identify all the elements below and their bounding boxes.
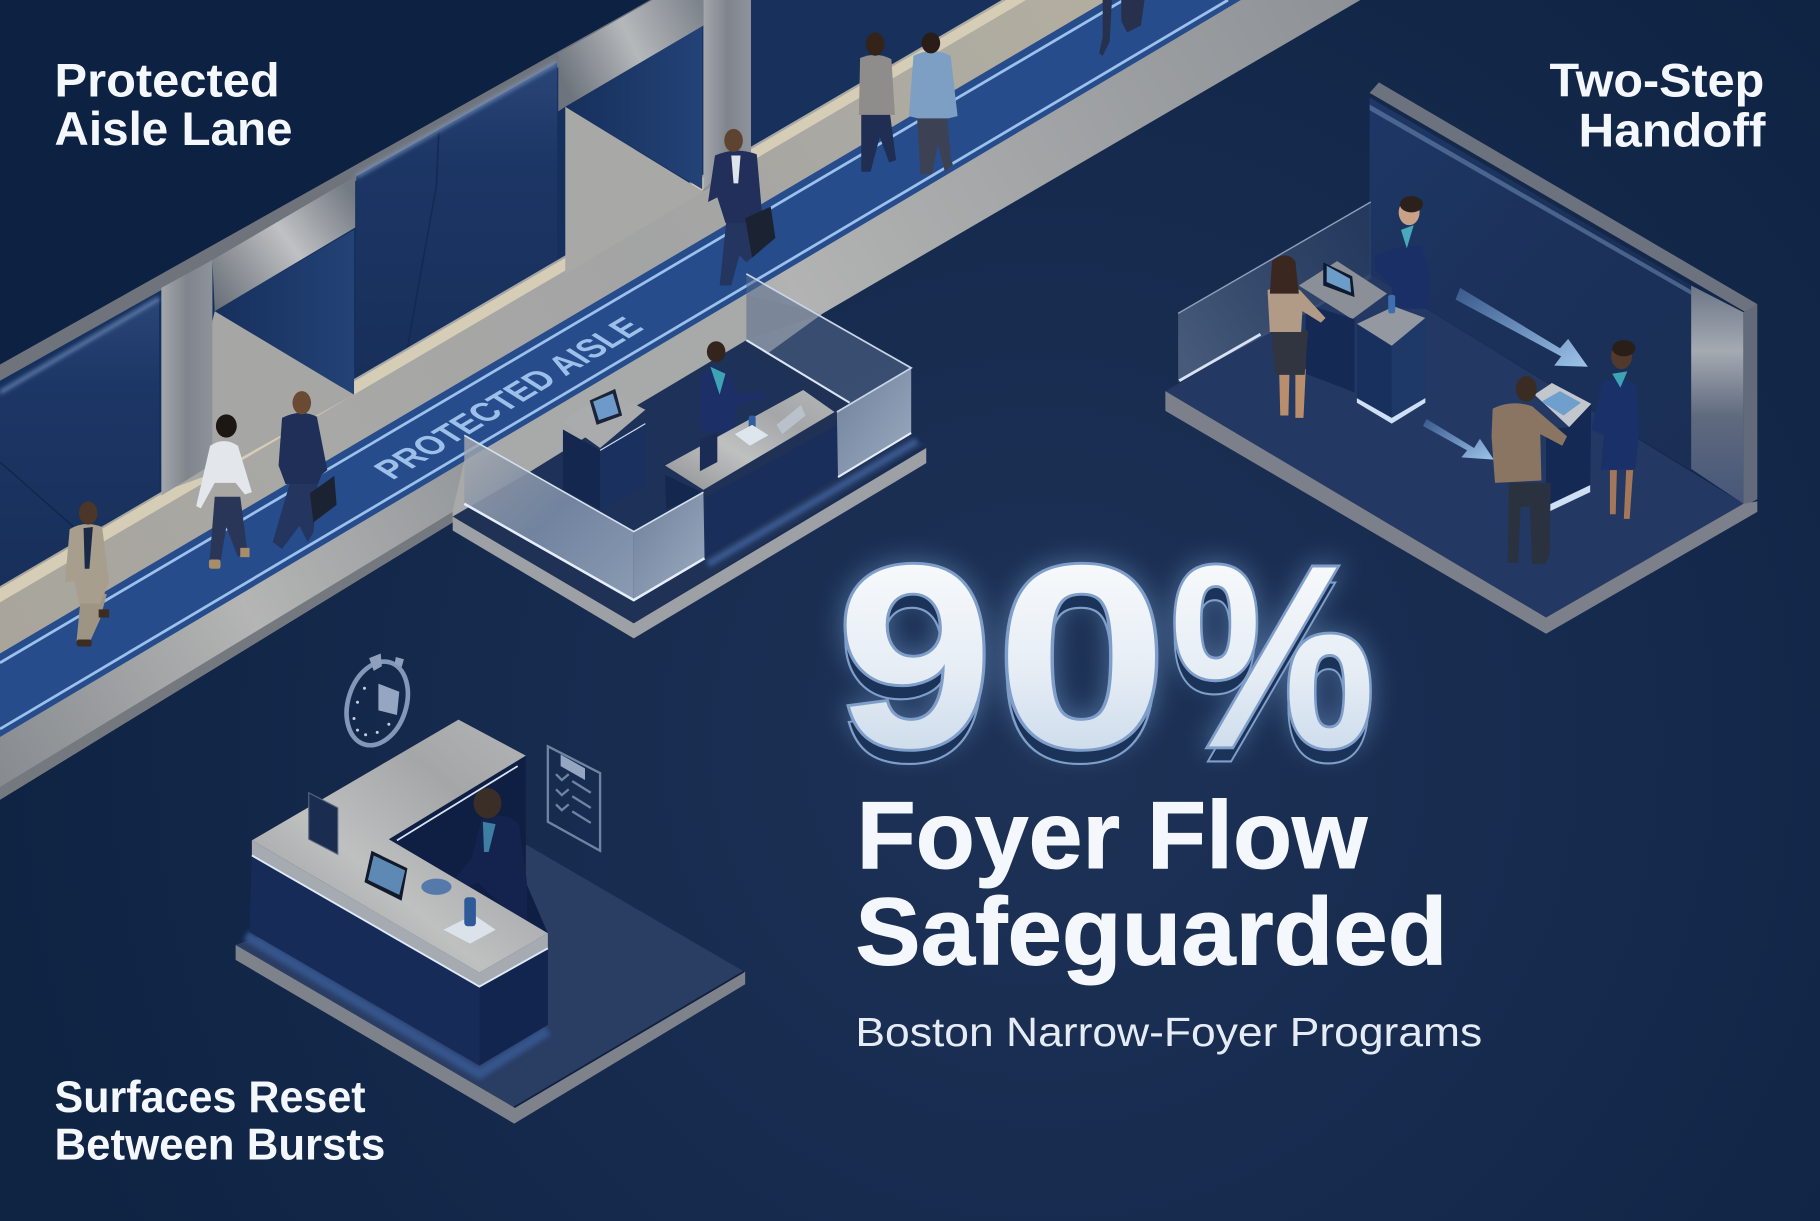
lower curb — [0, 0, 1360, 800]
big statistic: 90%: 0 — [996, 512, 1168, 802]
headline: foyer flow safeguarded: Foyer Flow — [857, 783, 1368, 889]
wall panel right — [751, 0, 1002, 145]
pillar 2 — [703, 0, 751, 189]
reception desk — [665, 390, 837, 558]
blue aisle floor — [0, 0, 1241, 737]
upper left dark backdrop — [0, 0, 656, 369]
cleaning cloth — [421, 879, 452, 895]
icon: stopwatch — [336, 653, 418, 753]
big statistic: 90%: 9 — [837, 512, 993, 802]
door opening 2 back wall — [565, 26, 702, 189]
wall panel left — [0, 298, 159, 586]
panel: reception with glass shields — [453, 274, 926, 638]
desk top — [252, 720, 548, 973]
desk platform floor — [236, 845, 744, 1107]
platform top — [453, 339, 925, 623]
headline: foyer flow safeguarded: Safeguarded — [855, 880, 1447, 986]
aisle edge lines — [0, 0, 1228, 729]
heading: protected aisle lane: Aisle Lane — [55, 103, 292, 156]
icon: clipboard — [548, 746, 600, 851]
person: woman white blouse — [196, 414, 252, 569]
big statistic: 90%: 9 — [837, 512, 993, 802]
subtitle: Boston Narrow-Foyer Programs — [855, 1009, 1482, 1055]
desk base glow — [708, 441, 917, 564]
sanitizer bottle — [464, 897, 476, 926]
handoff arrow 2 — [1423, 419, 1494, 460]
door opening 1 floor — [174, 311, 354, 488]
person: tan suit walker — [65, 501, 109, 647]
intake agent — [1374, 196, 1430, 309]
handoff arrow 1 — [1456, 288, 1588, 367]
front right glass shield — [634, 492, 705, 600]
heading: surfaces reset between bursts: Between Bursts — [55, 1121, 385, 1170]
booth floor — [1165, 274, 1743, 618]
heading: two-step handoff — [1550, 54, 1766, 157]
desk tablet — [364, 851, 407, 901]
notch recess — [389, 756, 548, 933]
wall panel centre — [356, 63, 557, 377]
pillar 1 — [161, 260, 212, 496]
big statistic: 90%: 9 — [836, 527, 992, 817]
upper concrete floor — [0, 0, 1114, 657]
desk platform base — [236, 945, 745, 1124]
desk sign — [309, 793, 338, 854]
heading: surfaces reset between bursts: Surfaces Reset — [55, 1073, 366, 1122]
big statistic: 90%: % — [1170, 512, 1375, 802]
front left glass shield — [464, 435, 634, 600]
left glass wall — [1178, 202, 1371, 382]
base glow — [246, 936, 548, 1074]
heading: surfaces reset between bursts — [55, 1073, 385, 1170]
person: top partial — [1099, 0, 1144, 56]
platform front — [453, 448, 926, 638]
handoff podium — [1534, 383, 1591, 513]
heading: protected aisle lane — [55, 54, 293, 156]
panel: surfaces reset desk — [236, 720, 745, 1124]
headline: foyer flow safeguarded — [855, 783, 1447, 986]
person: navy suit man upper — [708, 129, 775, 286]
big statistic: 90%: % — [1169, 527, 1374, 817]
big statistic: 90%: % — [1170, 512, 1375, 802]
booth wall cap — [1370, 82, 1757, 312]
curb front — [0, 512, 453, 800]
header beam 1 — [212, 176, 355, 311]
big statistic: 90%: 0 — [996, 512, 1168, 802]
heading: protected aisle lane: Protected — [55, 54, 280, 107]
inner floor — [533, 347, 837, 532]
booth wall — [1370, 98, 1691, 470]
back glass shield — [746, 274, 911, 433]
desk agent — [443, 788, 527, 933]
big statistic: 90%: 0 — [995, 527, 1167, 817]
heading: two-step handoff: Two-Step — [1550, 54, 1764, 107]
intake counter — [1299, 261, 1387, 392]
metal end panel — [1691, 286, 1743, 504]
booth base — [1165, 391, 1757, 634]
panel: protected aisle corridor — [0, 0, 1360, 800]
guest in brown jacket — [1492, 376, 1567, 564]
person: man blue sweater — [909, 33, 958, 174]
podium — [563, 389, 645, 510]
handoff agent — [1591, 340, 1639, 519]
panel: two-step handoff booth — [1165, 82, 1757, 634]
big statistic: 90% — [836, 512, 1375, 817]
header beam 2 — [558, 0, 703, 111]
person: navy suit man with briefcase — [273, 391, 337, 549]
guest in beige — [1268, 255, 1326, 418]
wall base — [0, 0, 1010, 592]
sanitizer podium — [1357, 295, 1425, 424]
person: woman gray blazer — [859, 33, 896, 172]
door opening 1 back wall — [215, 230, 354, 395]
concrete ledge — [453, 295, 823, 517]
desk front — [250, 855, 479, 1066]
sanitizer pad — [443, 915, 496, 944]
reception agent — [701, 341, 765, 435]
right glass shield — [837, 368, 911, 477]
aisle lettering: PROTECTED AISLE — [366, 312, 652, 485]
wall cap — [0, 0, 678, 381]
warm light strip — [0, 0, 1026, 602]
heading: two-step handoff: Handoff — [1579, 104, 1766, 157]
door opening 2 floor — [565, 107, 703, 274]
